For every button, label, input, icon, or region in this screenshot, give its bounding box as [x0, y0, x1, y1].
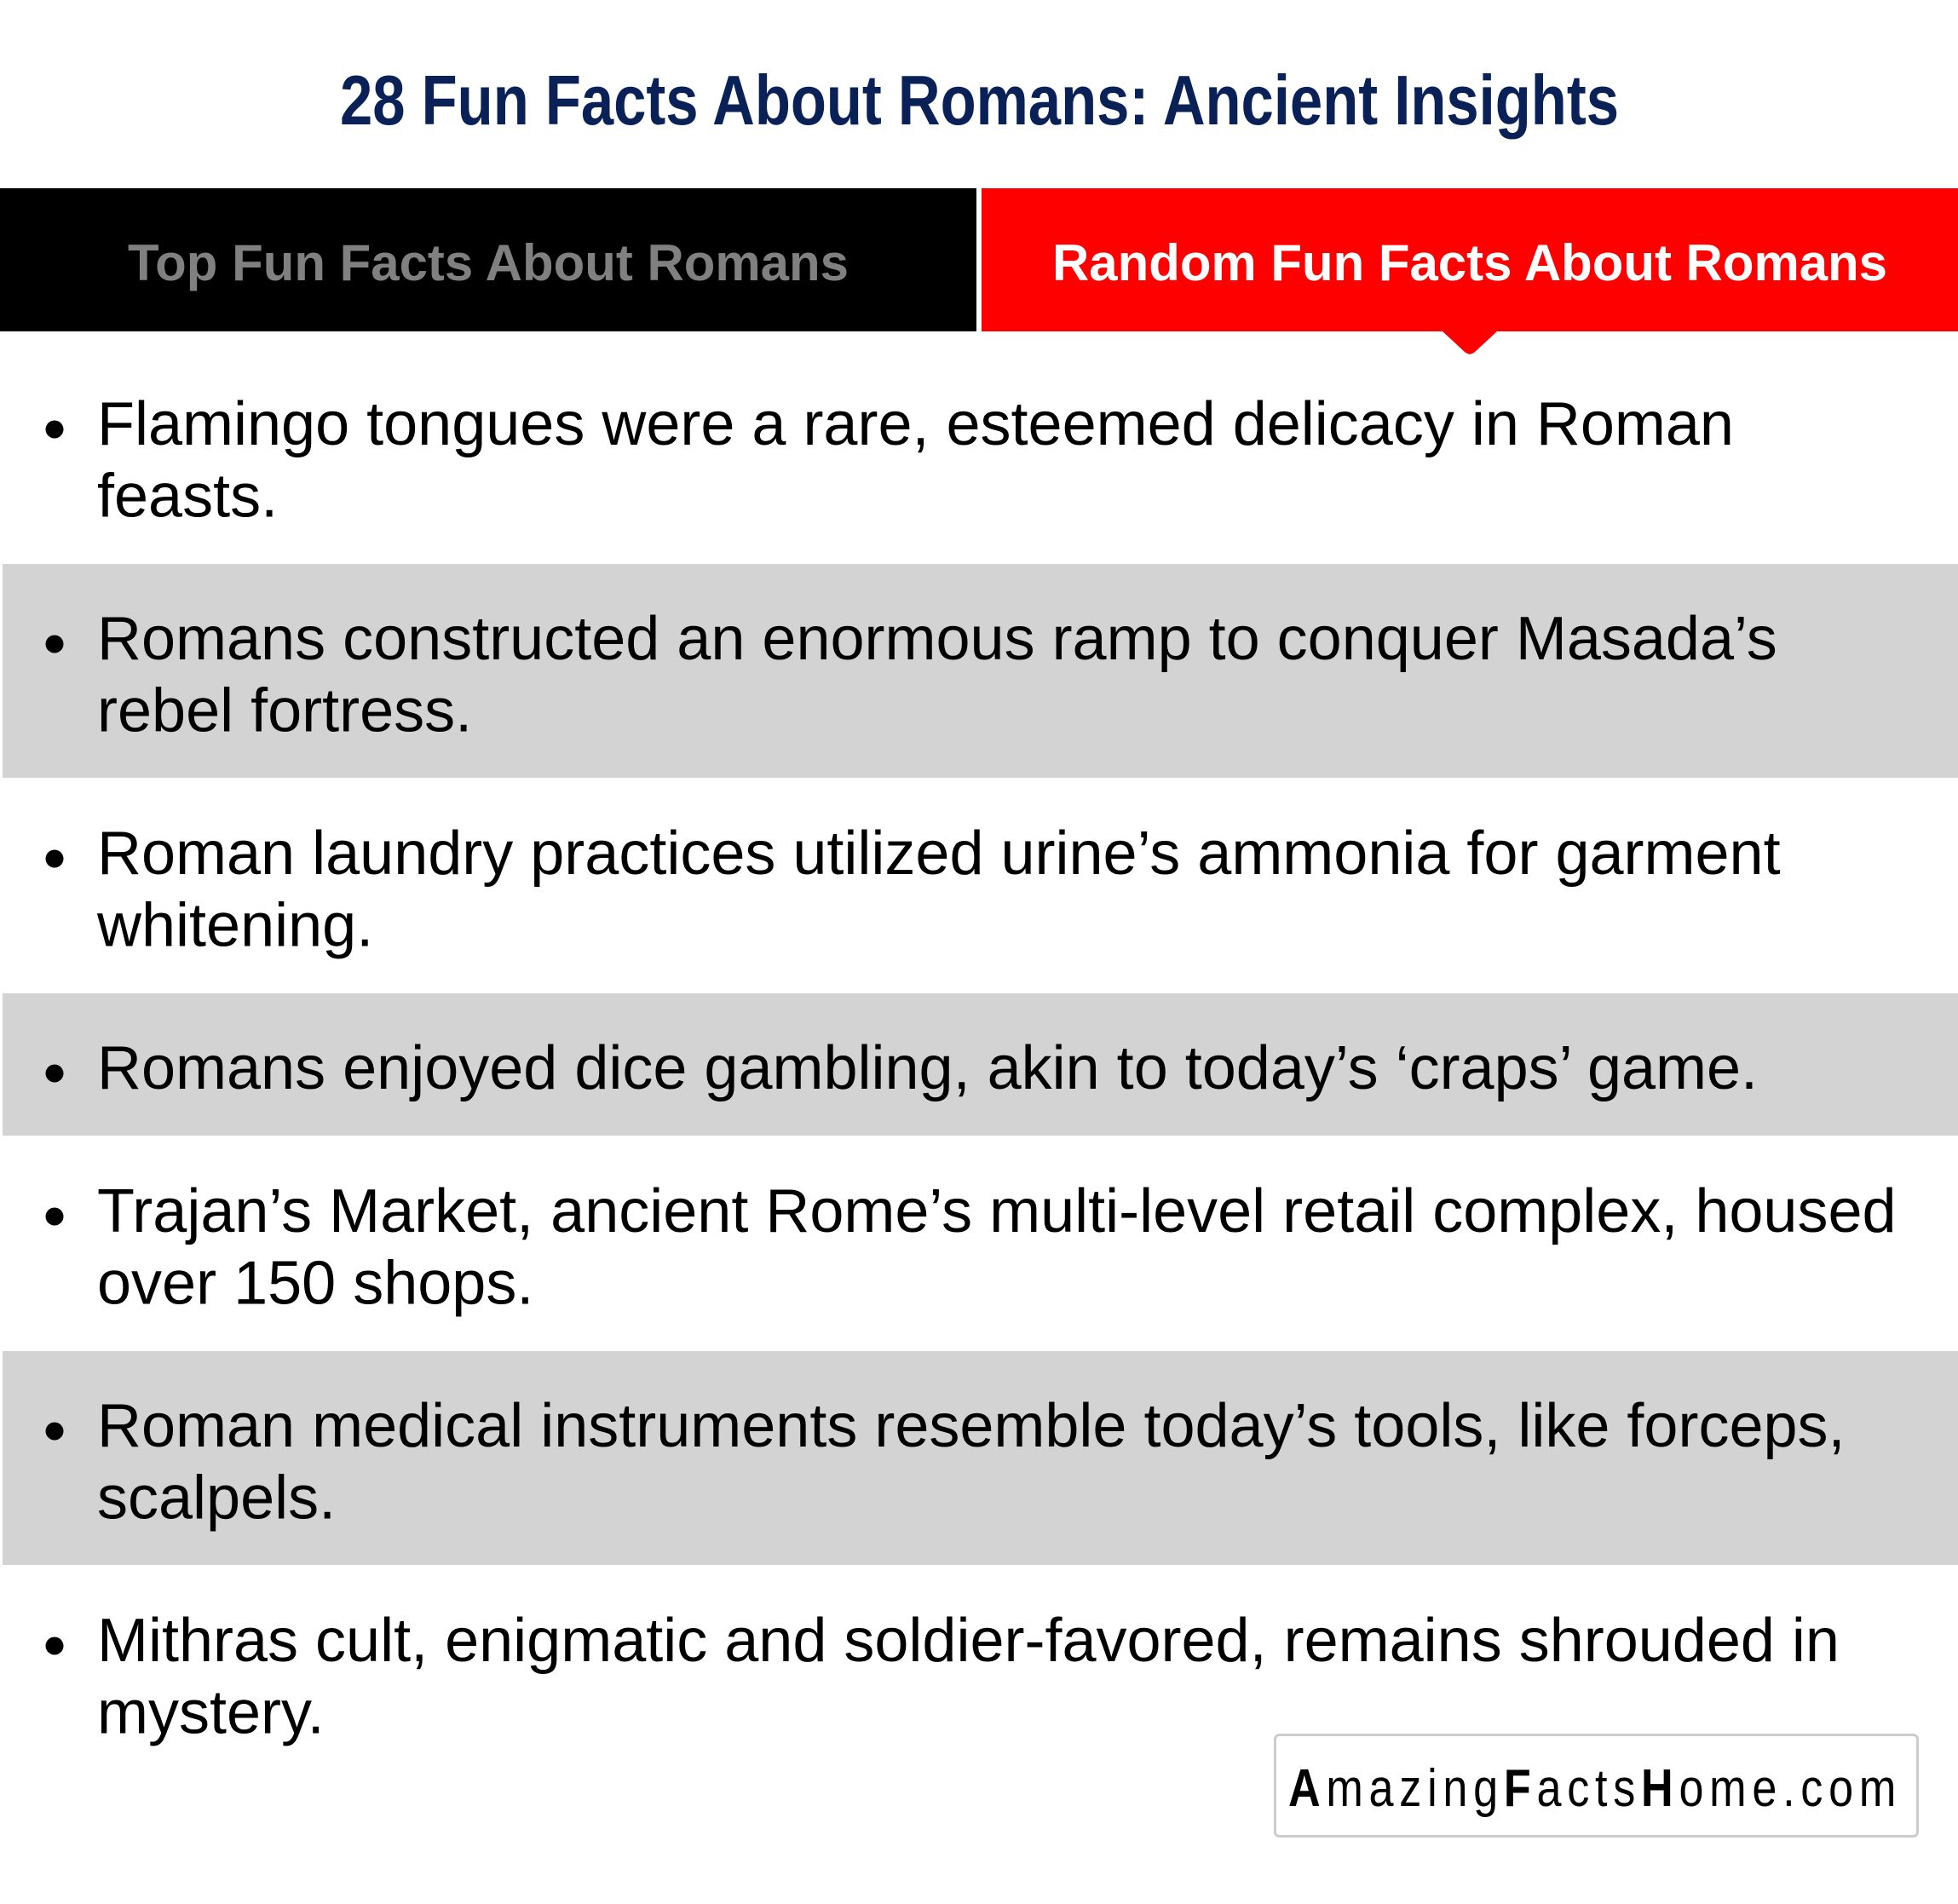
fact row 7: Mithras cult, enigmatic and soldier-favored, remains shrouded in [97, 1607, 1840, 1675]
tab: random fun facts (active) [982, 188, 1958, 354]
fact row 4 [3, 993, 1958, 1136]
fact row 3 [46, 820, 1781, 959]
tab: top fun facts: Top Fun Facts About Romans [128, 234, 849, 291]
fact row 7 [46, 1607, 1840, 1746]
fact row 6: Roman medical instruments resemble today’s tools, like forceps, [97, 1392, 1846, 1460]
fact row 7: mystery. [97, 1678, 325, 1746]
fact row 3: Roman laundry practices utilized urine’s ammonia for garment [97, 820, 1781, 888]
fact row 2: rebel fortress. [97, 676, 472, 745]
fact row 2 [3, 564, 1958, 778]
fact row 6 [3, 1351, 1958, 1565]
fact row 5 [46, 1177, 1897, 1317]
watermark badge: AmazingFactsHome.com [1288, 1759, 1902, 1818]
fact row 1: feasts. [97, 462, 278, 530]
title: 28 Fun Facts About Romans: Ancient Insights [340, 60, 1619, 140]
fact row 1: Flamingo tongues were a rare, esteemed delicacy in Roman [97, 390, 1734, 458]
fact row 4: Romans enjoyed dice gambling, akin to today’s ‘craps’ game. [97, 1034, 1758, 1102]
fact row 3: whitening. [96, 891, 373, 959]
tab: top fun facts [0, 188, 976, 331]
watermark badge [1275, 1734, 1917, 1837]
fact row 6: scalpels. [97, 1464, 336, 1532]
fact row 2: Romans constructed an enormous ramp to conquer Masada’s [97, 605, 1777, 673]
fact row 1 [46, 390, 1734, 530]
fact row 5: Trajan’s Market, ancient Rome’s multi-level retail complex, housed [97, 1177, 1897, 1245]
tab: random fun facts (active): Random Fun Facts About Romans [1052, 234, 1887, 291]
fact row 5: over 150 shops. [97, 1249, 533, 1317]
